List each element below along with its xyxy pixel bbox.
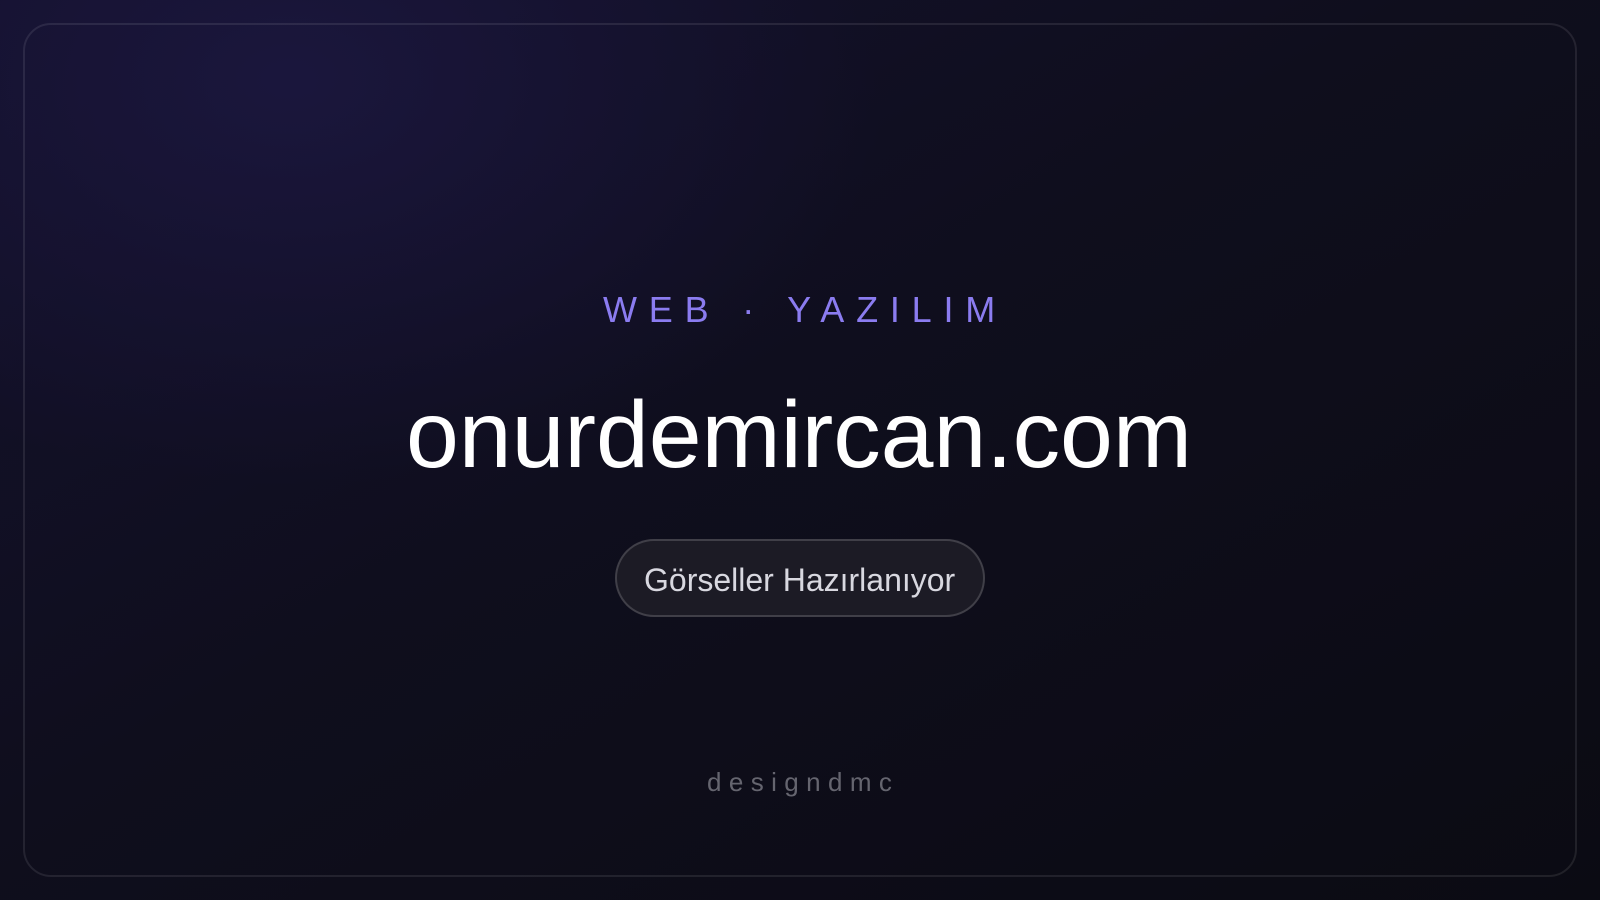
brand name: designdmc bbox=[707, 767, 899, 797]
eyebrow: category label: WEB · YAZILIM bbox=[603, 289, 1007, 330]
title: domain name: onurdemircan.com bbox=[406, 382, 1192, 488]
status pill bbox=[615, 539, 985, 617]
status pill text: Görseller Hazırlanıyor bbox=[644, 562, 955, 598]
